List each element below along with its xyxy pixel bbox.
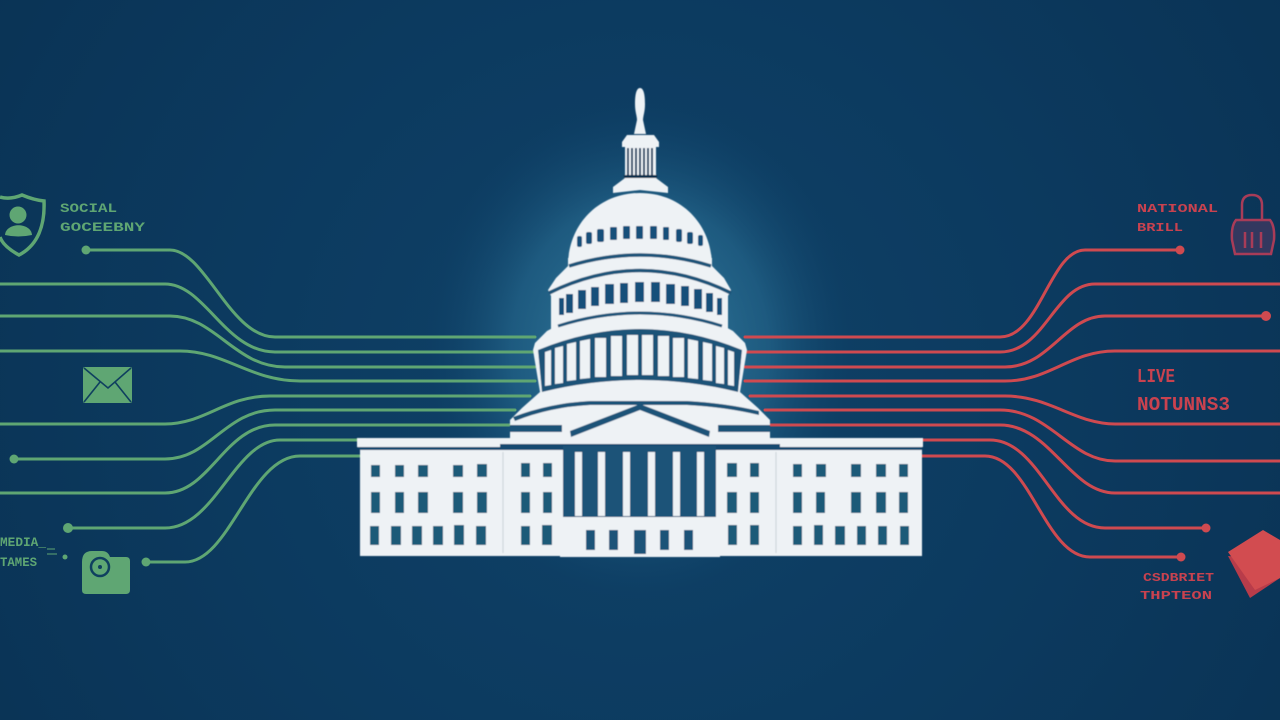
upper drum — [548, 255, 731, 330]
label: media times: TAMES — [0, 555, 37, 570]
colonnade — [510, 313, 770, 440]
label: social governance: GOCEEBNY — [60, 220, 145, 235]
central portico — [563, 446, 716, 554]
label: national brill — [1137, 202, 1218, 235]
red connector end dots — [1176, 246, 1271, 562]
main wings — [357, 438, 923, 557]
icon: envelope — [83, 367, 132, 403]
red connector lines — [745, 250, 1280, 557]
pediment and roof bands — [510, 401, 770, 437]
label: live notunns: LIVE — [1137, 366, 1175, 388]
icon: camera — [82, 551, 130, 594]
label: national brill: NATIONAL — [1137, 202, 1218, 216]
label: corporate tuition: CSDBRIET — [1143, 571, 1214, 585]
icon: red book — [1228, 530, 1280, 598]
label: live notunns: NOTUNNS3 — [1137, 394, 1230, 416]
label: media times — [0, 535, 57, 570]
label: national brill: BRILL — [1137, 221, 1183, 235]
label: corporate tuition — [1140, 571, 1214, 603]
green connector lines — [0, 250, 535, 562]
statue and lantern — [613, 88, 668, 193]
label: social governance: SOCIAL — [60, 201, 117, 216]
capitol building — [357, 88, 923, 557]
label: live notunns — [1137, 366, 1230, 416]
wing windows — [370, 463, 909, 545]
label: corporate tuition: THPTEON — [1140, 589, 1212, 603]
label: media times: MEDIA_ — [0, 535, 46, 550]
icon: shield with person — [0, 195, 44, 255]
label: social governance — [60, 201, 145, 235]
green connector end dots — [10, 246, 150, 566]
dome — [568, 193, 712, 266]
icon: padlock — [1232, 195, 1274, 254]
